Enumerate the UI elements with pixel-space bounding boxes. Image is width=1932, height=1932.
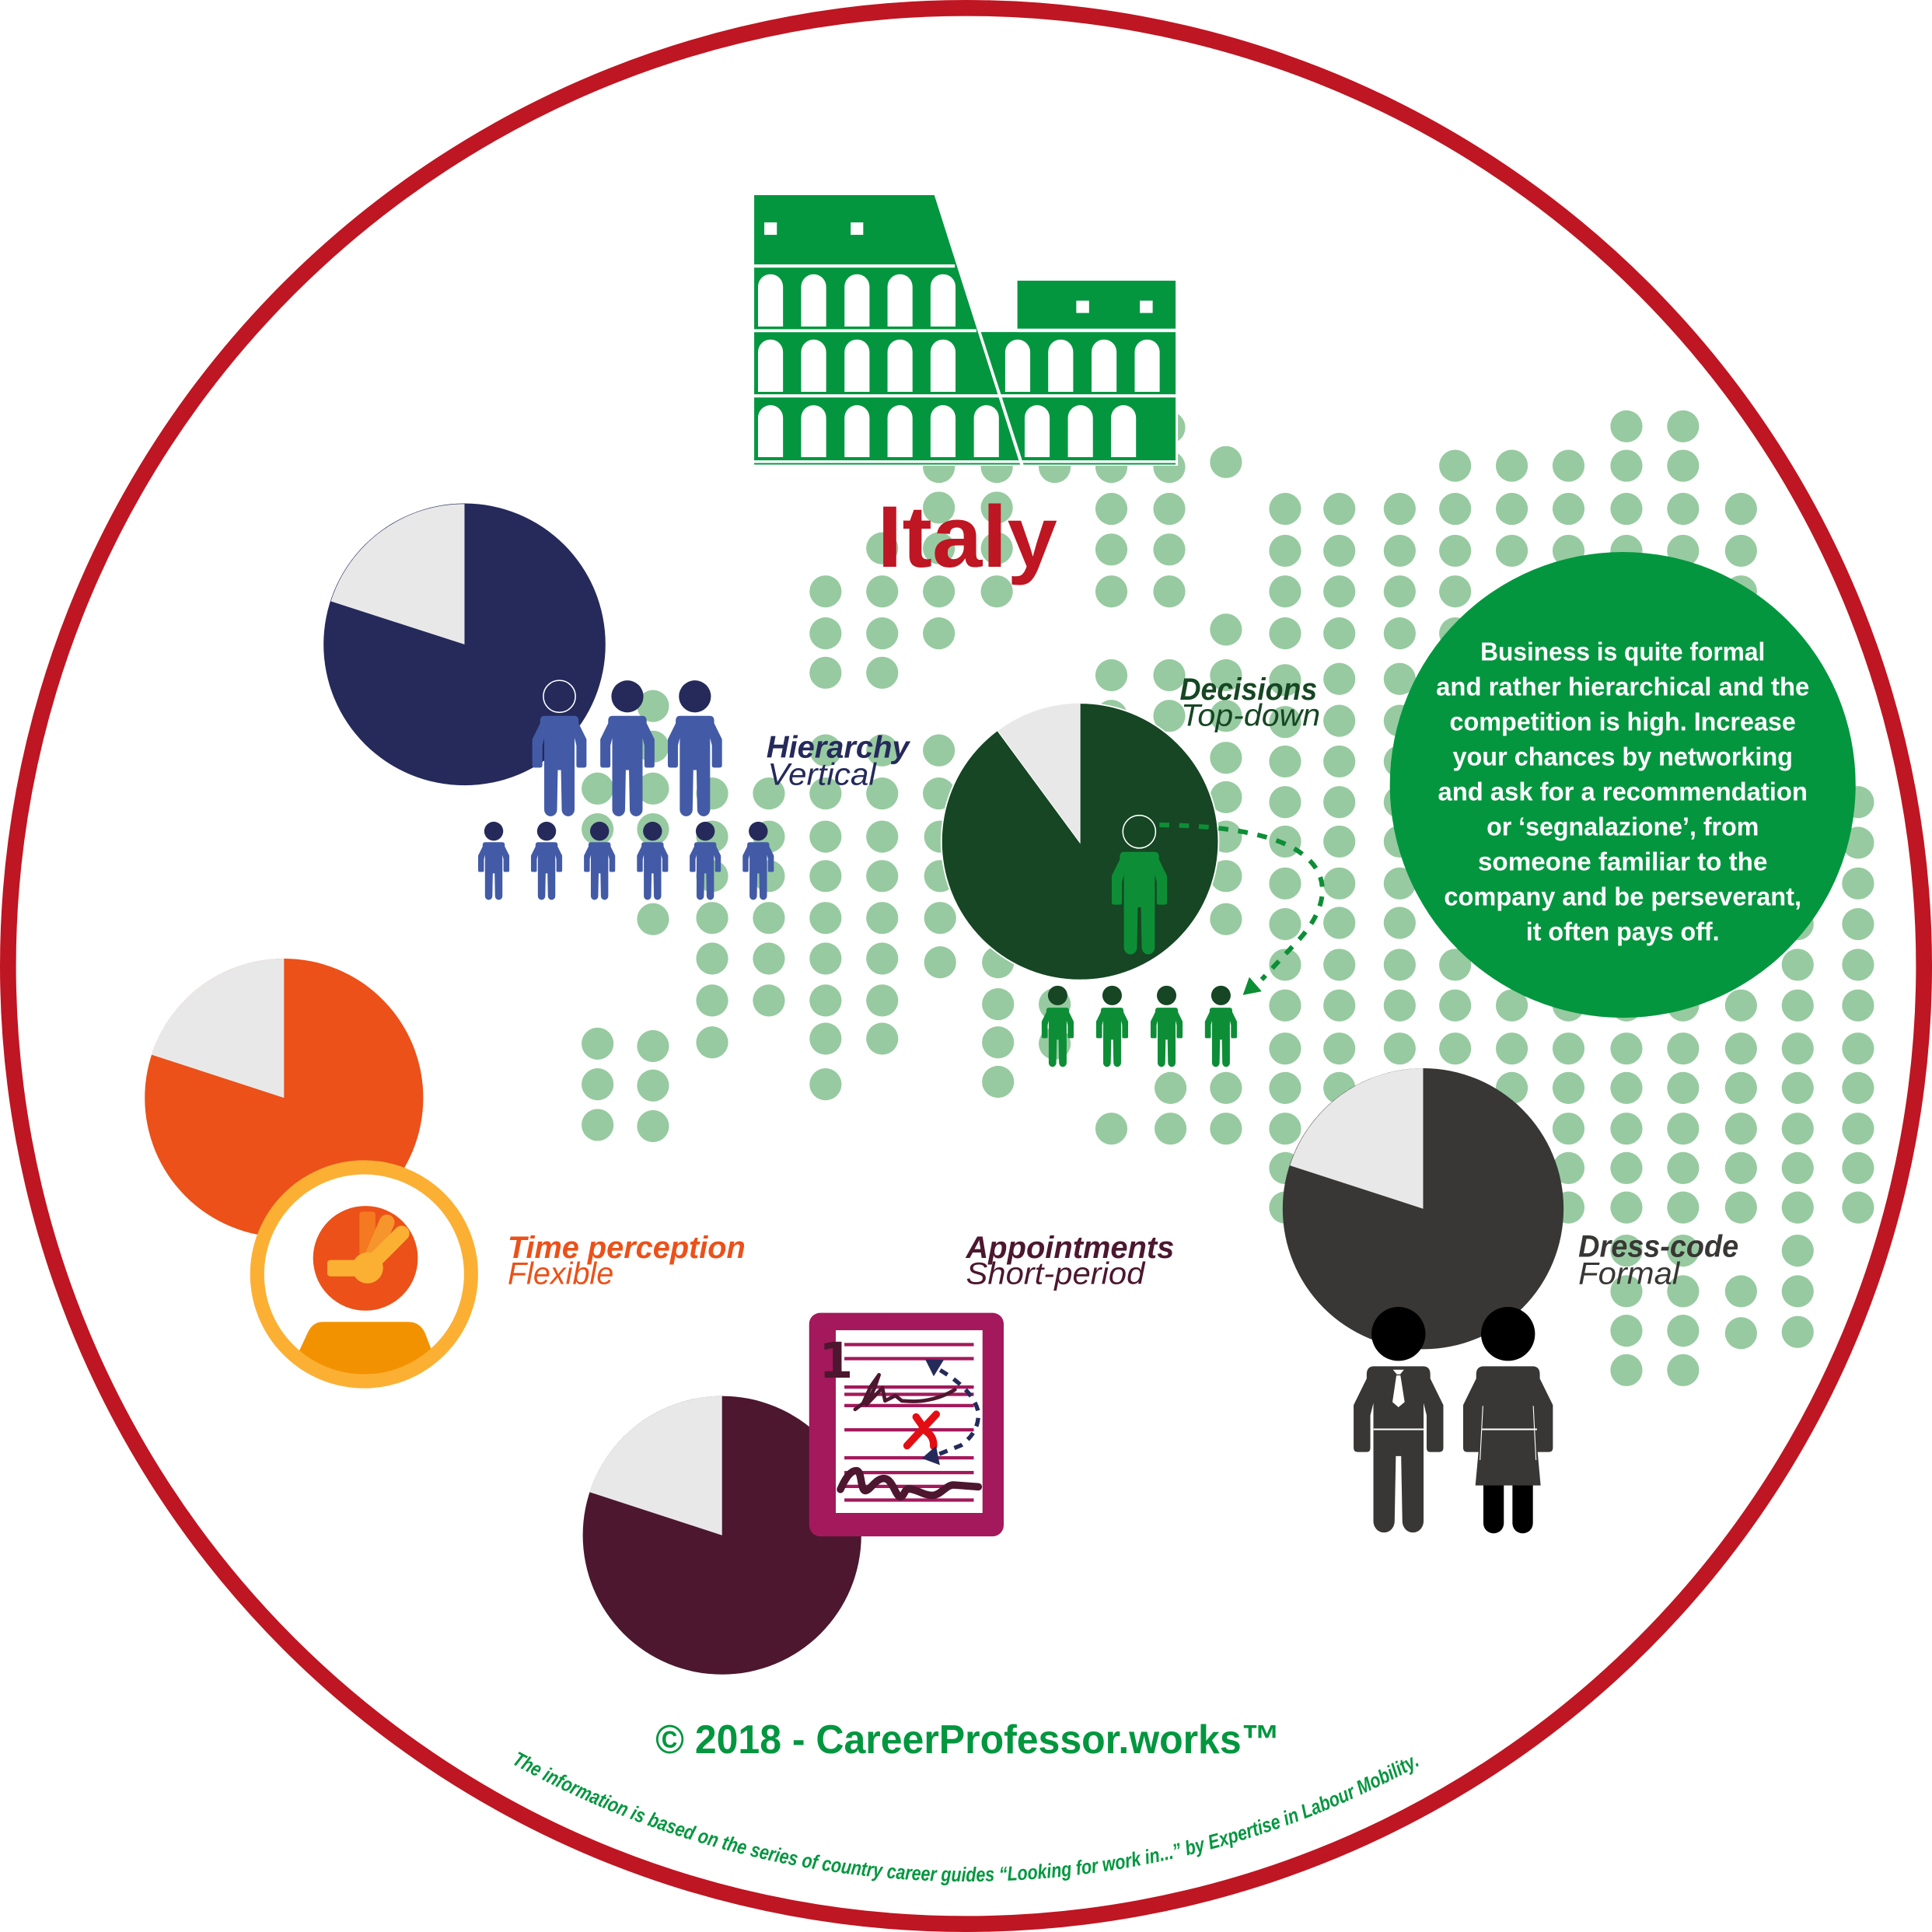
label: decisions: Top-down — [1181, 698, 1320, 732]
label: time perception: Time perception — [508, 1231, 746, 1265]
callout: business advice: company and be perseverant, — [1444, 883, 1801, 912]
panel: dress-code — [1283, 1068, 1738, 1533]
panel: hierarchy — [323, 504, 911, 900]
callout: business advice: Business is quite formal — [1480, 638, 1765, 666]
label: decisions: Decisions — [1179, 673, 1317, 707]
pie: hierarchy — [323, 504, 606, 785]
callout: business advice — [1390, 552, 1856, 1018]
label: dress-code — [1578, 1230, 1738, 1291]
title: Italy: Italy — [877, 487, 1057, 585]
panel: appointments — [583, 1231, 1174, 1675]
pie: dress-code — [1283, 1068, 1563, 1349]
label: hierarchy: Vertical — [767, 758, 877, 792]
callout: business advice: and rather hierarchical and the — [1436, 673, 1809, 701]
icon: three managers — [533, 680, 722, 816]
callout: business advice: it often pays off. — [1526, 918, 1720, 947]
label: dress-code: Formal — [1578, 1256, 1680, 1291]
copyright: © 2018 - CareerProfessor.works™ — [655, 1717, 1280, 1763]
dot map of Europe — [598, 426, 1858, 1370]
icon: woman in skirt suit — [1463, 1307, 1553, 1533]
panel: decisions — [942, 673, 1322, 1067]
callout: business advice: your chances by networking — [1453, 742, 1793, 771]
icon: agenda — [809, 1313, 1004, 1536]
icon: four employees — [1042, 986, 1237, 1067]
icon: decision maker — [1112, 816, 1167, 954]
pie: appointments — [583, 1396, 861, 1675]
label: appointments — [965, 1231, 1174, 1291]
panel: time perception — [145, 959, 746, 1392]
icon: agenda: 1 — [819, 1332, 853, 1389]
label: decisions — [1179, 673, 1320, 732]
icon: person with flexible clock — [257, 1167, 471, 1392]
label: dress-code: Dress-code — [1578, 1230, 1738, 1264]
label: time perception: Flexible — [508, 1256, 613, 1291]
label: time perception — [508, 1231, 746, 1291]
label: hierarchy — [767, 731, 911, 792]
label: appointments: Appointments — [965, 1231, 1174, 1265]
callout: business advice: and ask for a recommendation — [1438, 777, 1808, 806]
pie: time perception — [145, 959, 423, 1237]
callout: business advice: or ‘segnalazione’, from — [1487, 813, 1759, 842]
icon: six employees — [478, 822, 774, 900]
icon: man in suit — [1354, 1307, 1443, 1532]
icon: Colosseum — [754, 195, 1178, 466]
callout: business advice: someone familiar to the — [1478, 848, 1767, 877]
pie: decisions — [942, 703, 1218, 980]
source note on curved path: The information is based on the series of country career guides “Looking for work in...” by Expertise in Labour Mobility. — [514, 1752, 1419, 1885]
callout: business advice: competition is high. Increase — [1450, 707, 1796, 736]
label: hierarchy: Hierarchy — [767, 731, 911, 765]
arrow: top-down dashed — [1159, 825, 1322, 995]
label: appointments: Short-period — [966, 1256, 1146, 1291]
